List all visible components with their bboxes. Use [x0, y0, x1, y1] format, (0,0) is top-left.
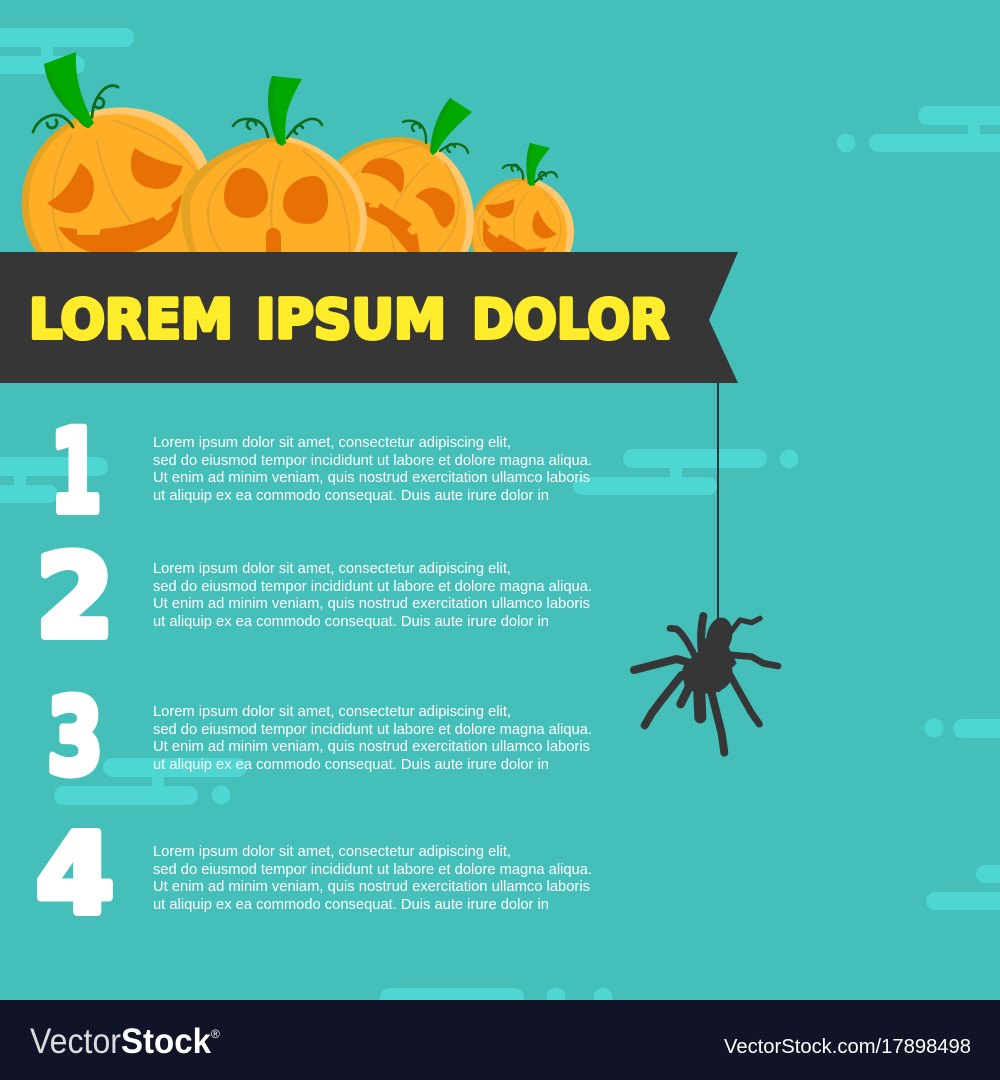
pumpkin 3 [330, 98, 474, 270]
text block 1 [153, 435, 592, 504]
footer logo: ® [211, 1027, 220, 1041]
pumpkin group [0, 52, 574, 320]
text block 2: Ut enim ad minim veniam, quis nostrud exercitation ullamco laboris [153, 596, 590, 612]
footer bar [0, 1000, 1000, 1080]
text block 2 [153, 561, 592, 630]
text block 3: Lorem ipsum dolor sit amet, consectetur adipiscing elit, [153, 704, 511, 720]
number 1: 1 [50, 405, 102, 538]
text block 4: ut aliquip ex ea commodo consequat. Duis aute irure dolor in [153, 897, 549, 913]
text block 1: Lorem ipsum dolor sit amet, consectetur adipiscing elit, [153, 435, 511, 451]
title text [29, 288, 669, 351]
title text: LOREM [29, 288, 233, 351]
text block 1: sed do eiusmod tempor incididunt ut labore et dolore magna aliqua. [153, 453, 592, 469]
number 2: 2 [36, 530, 114, 663]
text block 4: Lorem ipsum dolor sit amet, consectetur adipiscing elit, [153, 844, 511, 860]
footer image id: VectorStock.com/17898498 [724, 1036, 971, 1058]
text block 4: Ut enim ad minim veniam, quis nostrud exercitation ullamco laboris [153, 879, 590, 895]
title text: IPSUM [256, 288, 446, 351]
text block 4: sed do eiusmod tempor incididunt ut labore et dolore magna aliqua. [153, 862, 592, 878]
number 4: 4 [36, 810, 114, 938]
text block 3: sed do eiusmod tempor incididunt ut labore et dolore magna aliqua. [153, 722, 592, 738]
text block 2: Lorem ipsum dolor sit amet, consectetur adipiscing elit, [153, 561, 511, 577]
number 3: 3 [47, 676, 103, 798]
text block 1: Ut enim ad minim veniam, quis nostrud exercitation ullamco laboris [153, 470, 590, 486]
text block 2: sed do eiusmod tempor incididunt ut labore et dolore magna aliqua. [153, 579, 592, 595]
title text: DOLOR [472, 288, 669, 351]
pumpkin 2 [181, 76, 367, 280]
footer logo: Vector [30, 1022, 121, 1061]
icon: hanging spider [634, 615, 778, 753]
footer logo [30, 1022, 220, 1061]
text block 2: ut aliquip ex ea commodo consequat. Duis aute irure dolor in [153, 614, 549, 630]
footer logo: Stock [121, 1022, 212, 1061]
text block 3: Ut enim ad minim veniam, quis nostrud exercitation ullamco laboris [153, 739, 590, 755]
text block 3: ut aliquip ex ea commodo consequat. Duis aute irure dolor in [153, 757, 549, 773]
spider thread [717, 383, 719, 623]
pumpkin 4 (smallest) [470, 143, 574, 286]
text block 1: ut aliquip ex ea commodo consequat. Duis aute irure dolor in [153, 488, 549, 504]
title banner [0, 252, 738, 383]
text block 3 [153, 704, 592, 773]
text block 4 [153, 844, 592, 913]
pumpkin 1 (largest) [0, 52, 241, 320]
